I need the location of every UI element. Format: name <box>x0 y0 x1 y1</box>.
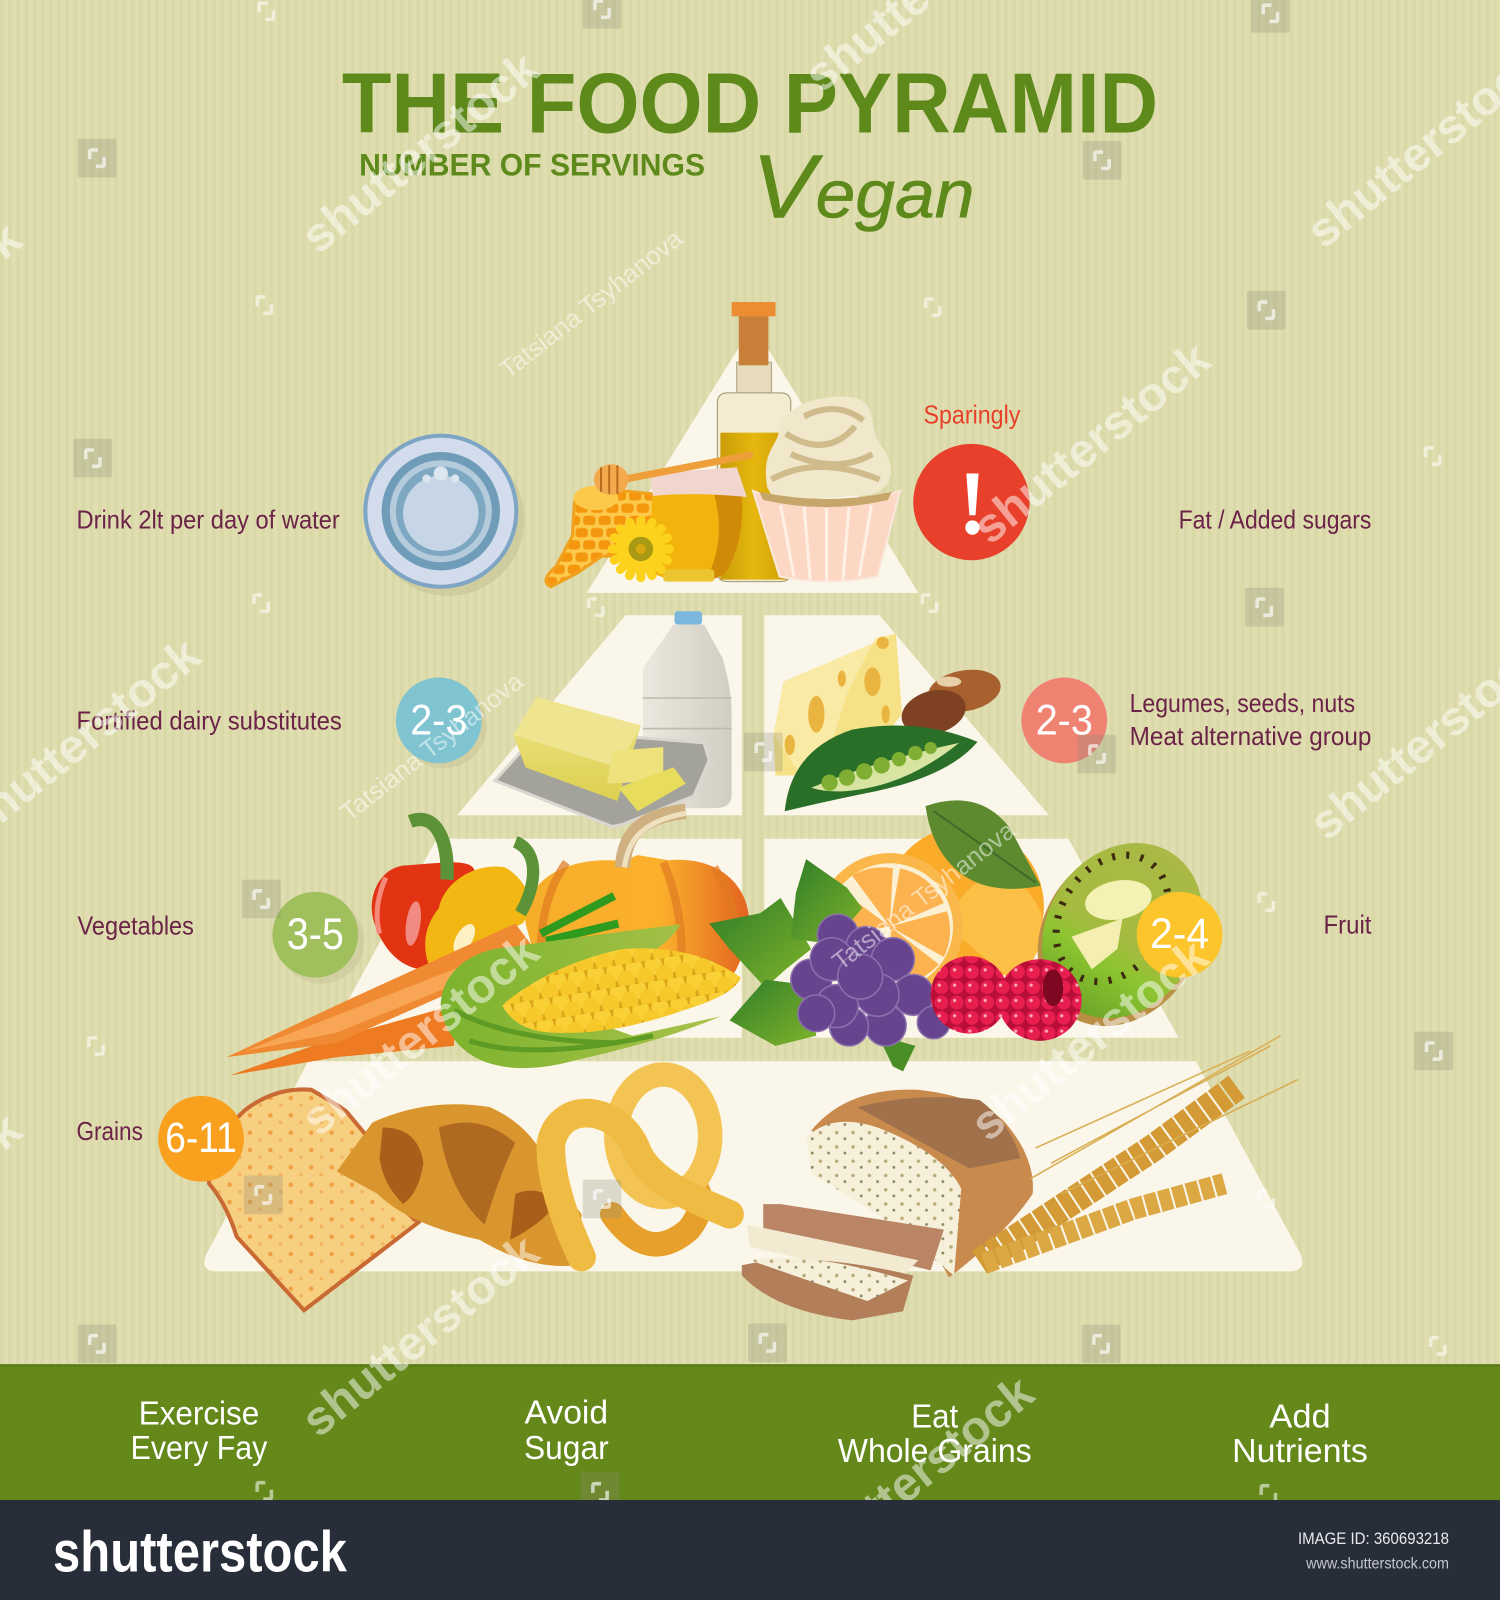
icon: glass of water <box>363 434 524 596</box>
tip: add nutrients <box>1232 1399 1368 1470</box>
wheat <box>980 1036 1298 1263</box>
red pepper <box>372 819 475 970</box>
pumpkin <box>525 811 749 980</box>
badge: 3-5: 3-5 <box>287 908 344 959</box>
badge: 2-3 legumes: 2-3 <box>1036 697 1093 745</box>
yellow pepper <box>425 842 533 964</box>
tip: avoid sugar: Avoid <box>524 1394 608 1431</box>
badge: 2-4 <box>1137 892 1222 978</box>
food: vegetables <box>227 811 749 1076</box>
food: grains <box>209 1036 1298 1320</box>
honeycomb <box>546 490 658 587</box>
raspberry right <box>998 959 1082 1041</box>
label: legumes: Legumes, seeds, nuts <box>1130 690 1355 718</box>
butter <box>513 697 686 811</box>
honey dipper <box>573 455 750 510</box>
corn husk <box>441 924 720 1068</box>
tip: exercise: Exercise <box>139 1395 259 1432</box>
label: dairy: Fortified dairy substitutes <box>77 708 342 736</box>
stock watermarks: Tatsiana Tsyhanova <box>335 667 529 827</box>
label: fats: Fat / Added sugars <box>1179 507 1371 535</box>
badge: 6-11 <box>158 1096 244 1182</box>
tip: avoid sugar <box>524 1394 609 1467</box>
stock watermarks: shutterstock <box>963 332 1221 554</box>
tip: add nutrients: Nutrients <box>1232 1433 1368 1470</box>
tip: add nutrients: Add <box>1269 1399 1331 1436</box>
footer image id: IMAGE ID: 360693218 <box>1298 1530 1449 1548</box>
carrots <box>227 923 531 1076</box>
cupcake <box>753 397 900 582</box>
subtitle: Vegan script: Vegan <box>752 137 974 237</box>
pyramid tiers <box>204 324 1302 1271</box>
croissant <box>337 1104 582 1266</box>
stock watermarks: Tatsiana Tsyhanova <box>495 224 689 384</box>
badge: 2-3 dairy: 2-3 <box>410 697 467 745</box>
label: sparingly: Sparingly <box>923 401 1021 429</box>
label: grains: Grains <box>77 1118 143 1146</box>
stock watermarks: shutterstock <box>292 1225 549 1447</box>
footer website: www.shutterstock.com <box>1305 1555 1449 1572</box>
leaf <box>926 800 1041 889</box>
green onion stalk <box>541 896 618 941</box>
badge: 2-3 legumes <box>1021 678 1107 763</box>
tier: legumes <box>764 615 1049 815</box>
stock watermarks: shutterstock <box>961 929 1219 1151</box>
label: meat alternative: Meat alternative group <box>1130 723 1371 751</box>
stock watermarks: shutterstock <box>787 1366 1044 1588</box>
vine leaves <box>709 859 862 1046</box>
nuts <box>897 664 1004 741</box>
kiwi <box>1004 813 1236 1057</box>
tip: exercise <box>131 1395 267 1467</box>
footer logo: shutterstock <box>53 1520 347 1584</box>
cheese <box>773 634 902 776</box>
orange slice <box>816 853 963 1000</box>
labels left and right <box>77 507 1371 1146</box>
badge: 6-11: 6-11 <box>165 1114 237 1162</box>
badge: 2-4: 2-4 <box>1150 910 1209 958</box>
small vine leaf <box>880 1039 915 1071</box>
subtitle: number of servings: NUMBER OF SERVINGS <box>359 147 705 183</box>
milk jug <box>643 611 732 808</box>
corn cob <box>502 948 741 1033</box>
food: fats and sugars <box>546 302 900 587</box>
tier: grains <box>204 1061 1302 1271</box>
tier: fruit <box>764 839 1179 1038</box>
tip: whole grains: Eat <box>911 1399 959 1436</box>
stock watermarks: shutterstock <box>292 41 549 264</box>
badge: 3-5 <box>272 892 364 984</box>
oil bottle <box>717 302 791 582</box>
orange <box>885 827 1045 986</box>
bottom banner <box>0 1364 1500 1502</box>
pea pod <box>785 726 978 811</box>
bread loaf <box>742 1090 1033 1320</box>
tier: vegetables <box>328 839 742 1038</box>
tip: whole grains <box>838 1399 1032 1470</box>
food: fruit <box>709 800 1236 1071</box>
tip: avoid sugar: Sugar <box>524 1430 609 1467</box>
tier: dairy substitutes <box>457 615 742 815</box>
honey jar <box>648 467 747 582</box>
footer bar <box>0 1500 1500 1600</box>
raspberry left <box>931 956 1008 1034</box>
flower <box>612 520 669 578</box>
label: fruit: Fruit <box>1323 912 1371 940</box>
toast <box>209 1089 418 1310</box>
label: water: Drink 2lt per day of water <box>77 507 340 535</box>
label: vegetables: Vegetables <box>78 913 194 941</box>
butter dish <box>495 730 709 827</box>
title: THE FOOD PYRAMID <box>342 56 1158 152</box>
tier: fats and sugars <box>587 324 918 593</box>
food: dairy substitutes <box>495 611 1004 827</box>
pretzel <box>551 1074 730 1257</box>
tip: whole grains: Whole Grains <box>838 1433 1032 1470</box>
stock watermarks: shutterstock <box>292 924 549 1146</box>
badge: sparingly <box>913 444 1030 560</box>
badge: 2-3 dairy <box>396 678 487 768</box>
grapes <box>791 914 950 1046</box>
tip: exercise: Every Fay <box>131 1430 267 1467</box>
stock watermarks: Tatsiana Tsyhanova <box>827 816 1021 976</box>
